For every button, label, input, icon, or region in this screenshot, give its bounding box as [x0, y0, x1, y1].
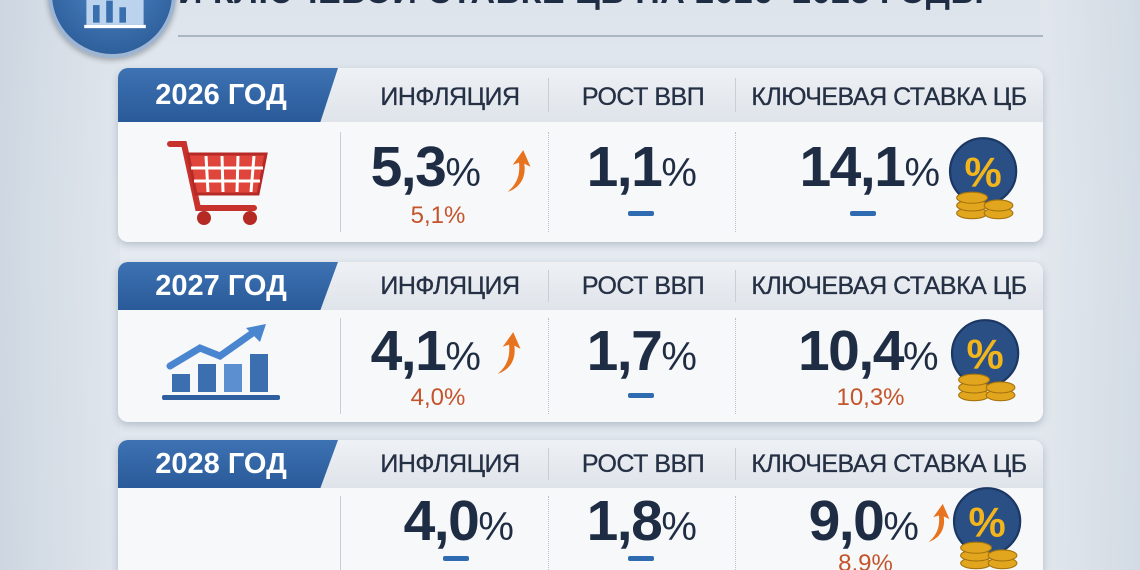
headers: КЛЮЧЕВАЯ СТАВКА ЦБ [751, 450, 1027, 478]
panel: 2027: 10,3% [836, 384, 905, 411]
headers: ИНФЛЯЦИЯ [380, 83, 520, 111]
gdp 2028: 1,8% [587, 489, 695, 553]
panel: 2027: 4,0% [411, 384, 465, 411]
panel: 2028 [118, 440, 1043, 570]
inflation 2027: 4,1% [371, 319, 479, 383]
panel: 2027 [118, 262, 1043, 422]
rate 2026: 14,1% [799, 135, 939, 199]
rate 2028: 9,0% [809, 489, 917, 553]
inflation 2026: 5,3% [371, 135, 479, 199]
icon: coins [952, 487, 1022, 570]
year tab 2027: 2027 ГОД [155, 270, 287, 302]
inflation 2028: 4,0% [404, 489, 512, 553]
gdp 2026: 1,1% [587, 135, 695, 199]
year tab 2028: 2028 ГОД [155, 448, 287, 480]
year tab 2028 [118, 440, 338, 488]
panel: 2026 [118, 68, 1043, 242]
icon: coins [948, 137, 1018, 220]
headers: КЛЮЧЕВАЯ СТАВКА ЦБ [751, 272, 1027, 300]
headers: РОСТ ВВП [582, 272, 704, 300]
headers: РОСТ ВВП [582, 450, 704, 478]
icon: coins: % [968, 499, 1006, 546]
logo circle [48, 0, 176, 58]
year tab 2026: 2026 ГОД [155, 79, 287, 111]
icon: coins: % [966, 331, 1004, 378]
rate 2027: 10,4% [798, 319, 937, 383]
icon: coins [950, 319, 1020, 402]
headers [380, 83, 1027, 111]
icon: chart in logo [84, 0, 146, 28]
icon: coins: % [964, 149, 1002, 196]
headers: КЛЮЧЕВАЯ СТАВКА ЦБ [751, 83, 1027, 111]
icon: growth chart [162, 324, 280, 400]
gdp 2027: 1,7% [587, 319, 695, 383]
headers: РОСТ ВВП [582, 83, 704, 111]
headers [380, 272, 1027, 300]
headers: ИНФЛЯЦИЯ [380, 272, 520, 300]
year tab 2027 [118, 262, 338, 310]
headers [380, 450, 1027, 478]
headers: ИНФЛЯЦИЯ [380, 450, 520, 478]
year tab 2026 [118, 68, 338, 122]
panel: 2026: 5,1% [411, 202, 465, 229]
icon: shopping cart [167, 141, 268, 225]
